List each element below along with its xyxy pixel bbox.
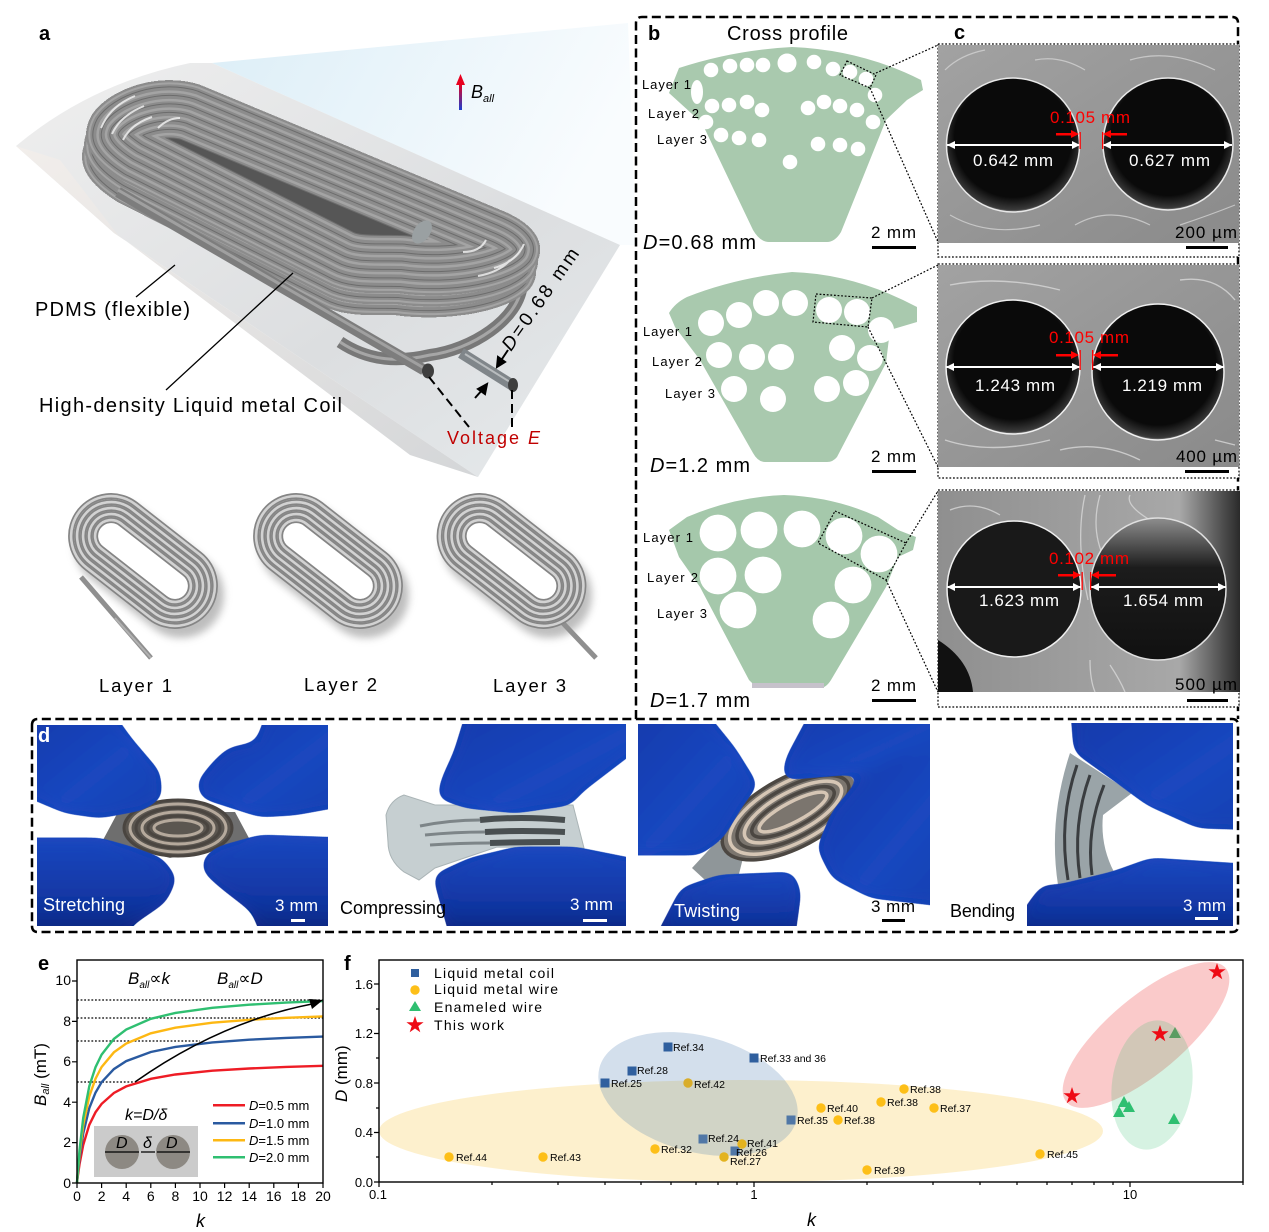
- y tick labels: 0.4: [355, 1125, 373, 1140]
- scale bar: 500 µm: [1175, 675, 1237, 694]
- side block: [103, 812, 250, 858]
- SEM image D=0.68: 0.105 mm: [1050, 108, 1130, 127]
- panel letters b c: b: [648, 23, 660, 45]
- proportionality labels: ∝: [149, 969, 162, 988]
- coil label: High-density Liquid metal Coil: [39, 395, 342, 417]
- proportionality labels: D: [251, 969, 263, 988]
- holes: [946, 300, 1224, 440]
- legend: [213, 1098, 309, 1165]
- diameter label: D=0.68 mm: [498, 245, 584, 355]
- layer 3 coil: [423, 480, 609, 658]
- reference labels: [456, 1042, 1078, 1177]
- white dimension arrows: [947, 586, 1226, 588]
- y tick labels: 1.2: [355, 1026, 373, 1041]
- blue gloves: [1027, 723, 1233, 926]
- scale bar: 3 mm: [275, 896, 318, 915]
- layer labels: Layer 1: [642, 77, 691, 92]
- dark coil streaks: [480, 818, 565, 843]
- bent strip: [1055, 753, 1132, 885]
- layer labels: Layer 1: [643, 530, 693, 545]
- plot frame and ticks: [72, 960, 323, 1188]
- x tick labels: 6: [147, 1188, 155, 1204]
- cross section D=1.2: [643, 265, 938, 477]
- this work stars: [1063, 963, 1226, 1103]
- proportionality labels: ∝: [238, 969, 251, 988]
- dotted saturation guides: [77, 1000, 323, 1082]
- layer labels: Layer 3: [657, 132, 707, 147]
- B field arrow: [456, 74, 465, 110]
- y tick labels: 8: [63, 1013, 71, 1029]
- zoom box and guides: [813, 265, 938, 467]
- x tick labels: 0: [73, 1188, 81, 1204]
- red region: this work: [1042, 939, 1250, 1131]
- white dimension arrows: [946, 366, 1224, 368]
- x tick labels: 10: [1123, 1187, 1137, 1202]
- scale bar: 2 mm: [871, 447, 916, 466]
- inset formula diagram: δ: [143, 1135, 153, 1152]
- x tick labels: 1: [750, 1187, 758, 1202]
- cross section D=1.7: [643, 491, 938, 712]
- wire ends: [422, 364, 518, 392]
- proportionality labels: [128, 969, 263, 991]
- x tick labels: 0.1: [369, 1187, 387, 1202]
- panel a: coil in PDMS: [16, 23, 636, 477]
- panel e: line chart: [31, 953, 331, 1231]
- x tick labels: 18: [291, 1188, 306, 1204]
- legend: D=1.5 mm: [249, 1133, 309, 1148]
- surface streaks: [945, 50, 1235, 230]
- legend: Liquid metal coil: [434, 965, 554, 981]
- SEM image D=1.2: [938, 264, 1239, 478]
- proportionality labels: B: [217, 969, 228, 988]
- proportionality labels: B: [128, 969, 139, 988]
- inner coil end: [408, 217, 436, 247]
- scale bar: 400 µm: [1176, 447, 1237, 466]
- heading cross profile: Cross profile: [727, 23, 848, 45]
- photo: twisting: [638, 724, 930, 926]
- x tick labels: 12: [217, 1188, 233, 1204]
- proportionality labels: all: [139, 980, 150, 991]
- blue curve: [77, 1037, 323, 1183]
- inset formula diagram: [94, 1126, 198, 1177]
- green sector: [669, 47, 923, 242]
- reference labels: Ref.43: [550, 1152, 581, 1164]
- proportionality labels: k: [162, 969, 172, 988]
- blue region: liquid metal coil: [584, 1012, 812, 1176]
- cross section D=0.68: [642, 45, 938, 254]
- layer 1 coil: [55, 480, 241, 658]
- blue magnetic field background: [212, 23, 636, 245]
- reference labels: Ref.37: [940, 1103, 971, 1115]
- x tick labels: 2: [98, 1188, 106, 1204]
- holes: [946, 78, 1233, 212]
- clear block end: [692, 840, 745, 880]
- legend: D=2.0 mm: [249, 1150, 309, 1165]
- reference labels: Ref.33 and 36: [760, 1053, 826, 1065]
- y axis title: B: [31, 1095, 50, 1106]
- legend: [406, 965, 558, 1033]
- reference labels: Ref.28: [637, 1065, 668, 1077]
- panel letter f: f: [344, 953, 351, 975]
- reference labels: Ref.35: [797, 1115, 828, 1127]
- layer captions: Layer 1: [99, 675, 172, 696]
- inset formula diagram: D: [116, 1135, 128, 1152]
- B all label: all: [483, 93, 495, 105]
- blue gloves: [37, 725, 328, 926]
- light coil lines: [420, 820, 490, 845]
- reference labels: Ref.34: [673, 1042, 704, 1054]
- layer captions: [99, 674, 566, 696]
- label: Stretching: [43, 895, 125, 915]
- reference labels: Ref.41: [747, 1138, 778, 1150]
- dimension text: 1.623 mm: [979, 591, 1059, 610]
- PDMS lower facet: [16, 146, 478, 477]
- y tick labels: 1.6: [355, 977, 373, 992]
- x tick labels: 4: [122, 1188, 130, 1204]
- scale bar: 200 µm: [1175, 223, 1237, 242]
- panel letters b c: [648, 22, 965, 45]
- legend: This work: [434, 1017, 505, 1033]
- SEM image D=1.7: [938, 490, 1240, 707]
- photo: compressing: [340, 724, 626, 926]
- liquid metal coil, three stacked layers: [82, 80, 540, 359]
- surface streaks: [945, 279, 1235, 460]
- y axis title: all: [40, 1083, 52, 1095]
- twisted coil: [708, 744, 878, 880]
- layer labels: Layer 2: [647, 570, 698, 585]
- green sector: [669, 272, 917, 462]
- enameled wire points: [1113, 1027, 1181, 1124]
- lead wire: long: [118, 190, 424, 370]
- reference labels: Ref.24: [708, 1133, 739, 1145]
- dark lower-left corner: [938, 640, 973, 692]
- reference labels: Ref.27: [730, 1156, 761, 1168]
- reference labels: Ref.38: [844, 1115, 875, 1127]
- voltage label: Voltage E: [447, 428, 541, 448]
- lead wire: short: [461, 353, 512, 385]
- right hole: [1090, 518, 1226, 660]
- photo: bending: [951, 723, 1233, 926]
- diameter label: D=0.68 mm: [643, 232, 756, 254]
- x axis title: k: [807, 1210, 817, 1230]
- reference labels: Ref.25: [611, 1078, 642, 1090]
- reference labels: Ref.39: [874, 1165, 905, 1177]
- x tick labels: [73, 1188, 331, 1204]
- scale bar: 3 mm: [871, 897, 915, 916]
- SEM image D=1.2: 1.219 mm: [1122, 376, 1202, 395]
- black trend arrow: [135, 999, 323, 1082]
- x tick labels: 8: [172, 1188, 180, 1204]
- x tick labels: 10: [192, 1188, 208, 1204]
- y tick labels: 0.8: [355, 1076, 373, 1091]
- y tick labels: 2: [63, 1134, 71, 1150]
- panel letter e: e: [38, 953, 49, 975]
- y tick labels: 0: [63, 1175, 71, 1191]
- liquid metal wire points: [444, 1078, 1045, 1175]
- y axis title: (mT): [31, 1043, 50, 1084]
- panel letters b c: c: [954, 22, 965, 44]
- SEM image D=1.7: 1.654 mm: [1123, 591, 1203, 610]
- compressed PDMS block: [386, 795, 584, 880]
- PDMS block: [16, 63, 620, 477]
- y tick labels: 0.0: [355, 1175, 373, 1190]
- SEM background: [938, 491, 1240, 692]
- conductor holes: [691, 54, 882, 169]
- legend: D=0.5 mm: [249, 1098, 309, 1113]
- scale bar: 3 mm: [1183, 896, 1226, 915]
- layer captions: Layer 3: [493, 675, 566, 696]
- liquid metal coil points: [600, 1042, 796, 1156]
- blue gloves: [638, 724, 930, 926]
- leader lines: [136, 265, 293, 390]
- label: Bending: [950, 901, 1015, 921]
- B all label: B: [471, 82, 483, 102]
- layer labels: [643, 324, 715, 401]
- scale bar: 3 mm: [570, 895, 613, 914]
- red gap indicator: [1058, 571, 1116, 590]
- y tick labels: 6: [63, 1053, 71, 1069]
- diameter arrows: [475, 350, 508, 398]
- legend: D=1.0 mm: [249, 1116, 309, 1131]
- reference labels: Ref.26: [736, 1147, 767, 1159]
- SEM image D=1.7: 0.102 mm: [1049, 549, 1129, 568]
- x tick labels: 14: [241, 1188, 257, 1204]
- label: Compressing: [340, 898, 446, 918]
- yellow region: liquid metal wire: [379, 1080, 1103, 1182]
- PDMS label: PDMS (flexible): [35, 299, 190, 321]
- reference labels: Ref.40: [827, 1103, 858, 1115]
- x axis title: k: [196, 1211, 206, 1231]
- bent coil streaks: [1065, 765, 1104, 880]
- green region: enameled wire: [1103, 1015, 1201, 1155]
- layer labels: Layer 3: [665, 386, 715, 401]
- layer 2 coil: [240, 480, 426, 655]
- stretched coil: [124, 800, 232, 856]
- SEM image D=1.2: 0.105 mm: [1049, 328, 1129, 347]
- conductor holes: [698, 290, 894, 412]
- layer captions: Layer 2: [304, 674, 377, 695]
- dimension text: 1.243 mm: [975, 376, 1055, 395]
- reference labels: Ref.44: [456, 1152, 487, 1164]
- layer labels: Layer 2: [652, 354, 702, 369]
- legend: Enameled wire: [434, 999, 542, 1015]
- left hole: [947, 521, 1081, 657]
- surface streaks: [950, 495, 1150, 692]
- layer labels: [643, 530, 707, 621]
- scale bar: 2 mm: [871, 676, 916, 695]
- panel letter d: d: [38, 725, 50, 747]
- x tick labels: 20: [315, 1188, 331, 1204]
- red gap indicator: [1056, 130, 1127, 149]
- x tick labels: [369, 1187, 1137, 1202]
- red gap indicator: [1056, 350, 1118, 370]
- panel f: scatter chart: [332, 939, 1250, 1230]
- inset formula diagram: D: [166, 1135, 178, 1152]
- scale bar: 2 mm: [871, 223, 916, 242]
- green sector: [669, 495, 916, 688]
- proportionality labels: all: [228, 980, 239, 991]
- lower gray edge: [752, 683, 824, 688]
- diameter label: D=1.7 mm: [650, 690, 750, 712]
- conductor holes: [700, 511, 897, 638]
- legend: Liquid metal wire: [434, 981, 558, 997]
- y tick labels: 4: [63, 1094, 71, 1110]
- SEM image D=0.68: [938, 44, 1239, 257]
- zoom box and guides: [840, 45, 938, 242]
- panel d: dashed border: [32, 719, 1238, 932]
- reference labels: Ref.38: [910, 1084, 941, 1096]
- SEM background: [938, 45, 1239, 243]
- layer labels: Layer 1: [643, 324, 692, 339]
- reference labels: Ref.32: [661, 1144, 692, 1156]
- label: Twisting: [674, 901, 740, 921]
- y tick labels: [355, 977, 373, 1190]
- yellow curve: [77, 1016, 323, 1183]
- green curve: [77, 1001, 323, 1183]
- panel letter a: a: [39, 23, 51, 45]
- SEM image D=0.68: 0.627 mm: [1129, 151, 1210, 170]
- reference labels: Ref.38: [887, 1097, 918, 1109]
- plot frame and ticks: [374, 960, 1243, 1187]
- zoom box and guides: [818, 491, 938, 692]
- layer labels: Layer 3: [657, 606, 707, 621]
- y tick labels: 10: [55, 972, 71, 988]
- reference labels: Ref.45: [1047, 1149, 1078, 1161]
- layer labels: Layer 2: [648, 106, 699, 121]
- x tick labels: 16: [266, 1188, 282, 1204]
- blue gloves: [435, 724, 626, 926]
- dimension text: 0.642 mm: [973, 151, 1053, 170]
- formula: k=D/δ: [125, 1107, 168, 1124]
- layer coils: [55, 480, 609, 696]
- y axis title: D (mm): [332, 1045, 351, 1102]
- SEM background: [938, 265, 1239, 467]
- y tick labels: [55, 972, 71, 1191]
- reference labels: Ref.42: [694, 1079, 725, 1091]
- layer labels: [642, 77, 707, 147]
- photo: stretching: [37, 725, 328, 926]
- white dimension arrows: [947, 144, 1232, 146]
- voltage dashed leads: [429, 377, 512, 427]
- diameter label: D=1.2 mm: [650, 455, 750, 477]
- red curve: [77, 1066, 323, 1183]
- dashed border panels b and c: [636, 17, 1238, 719]
